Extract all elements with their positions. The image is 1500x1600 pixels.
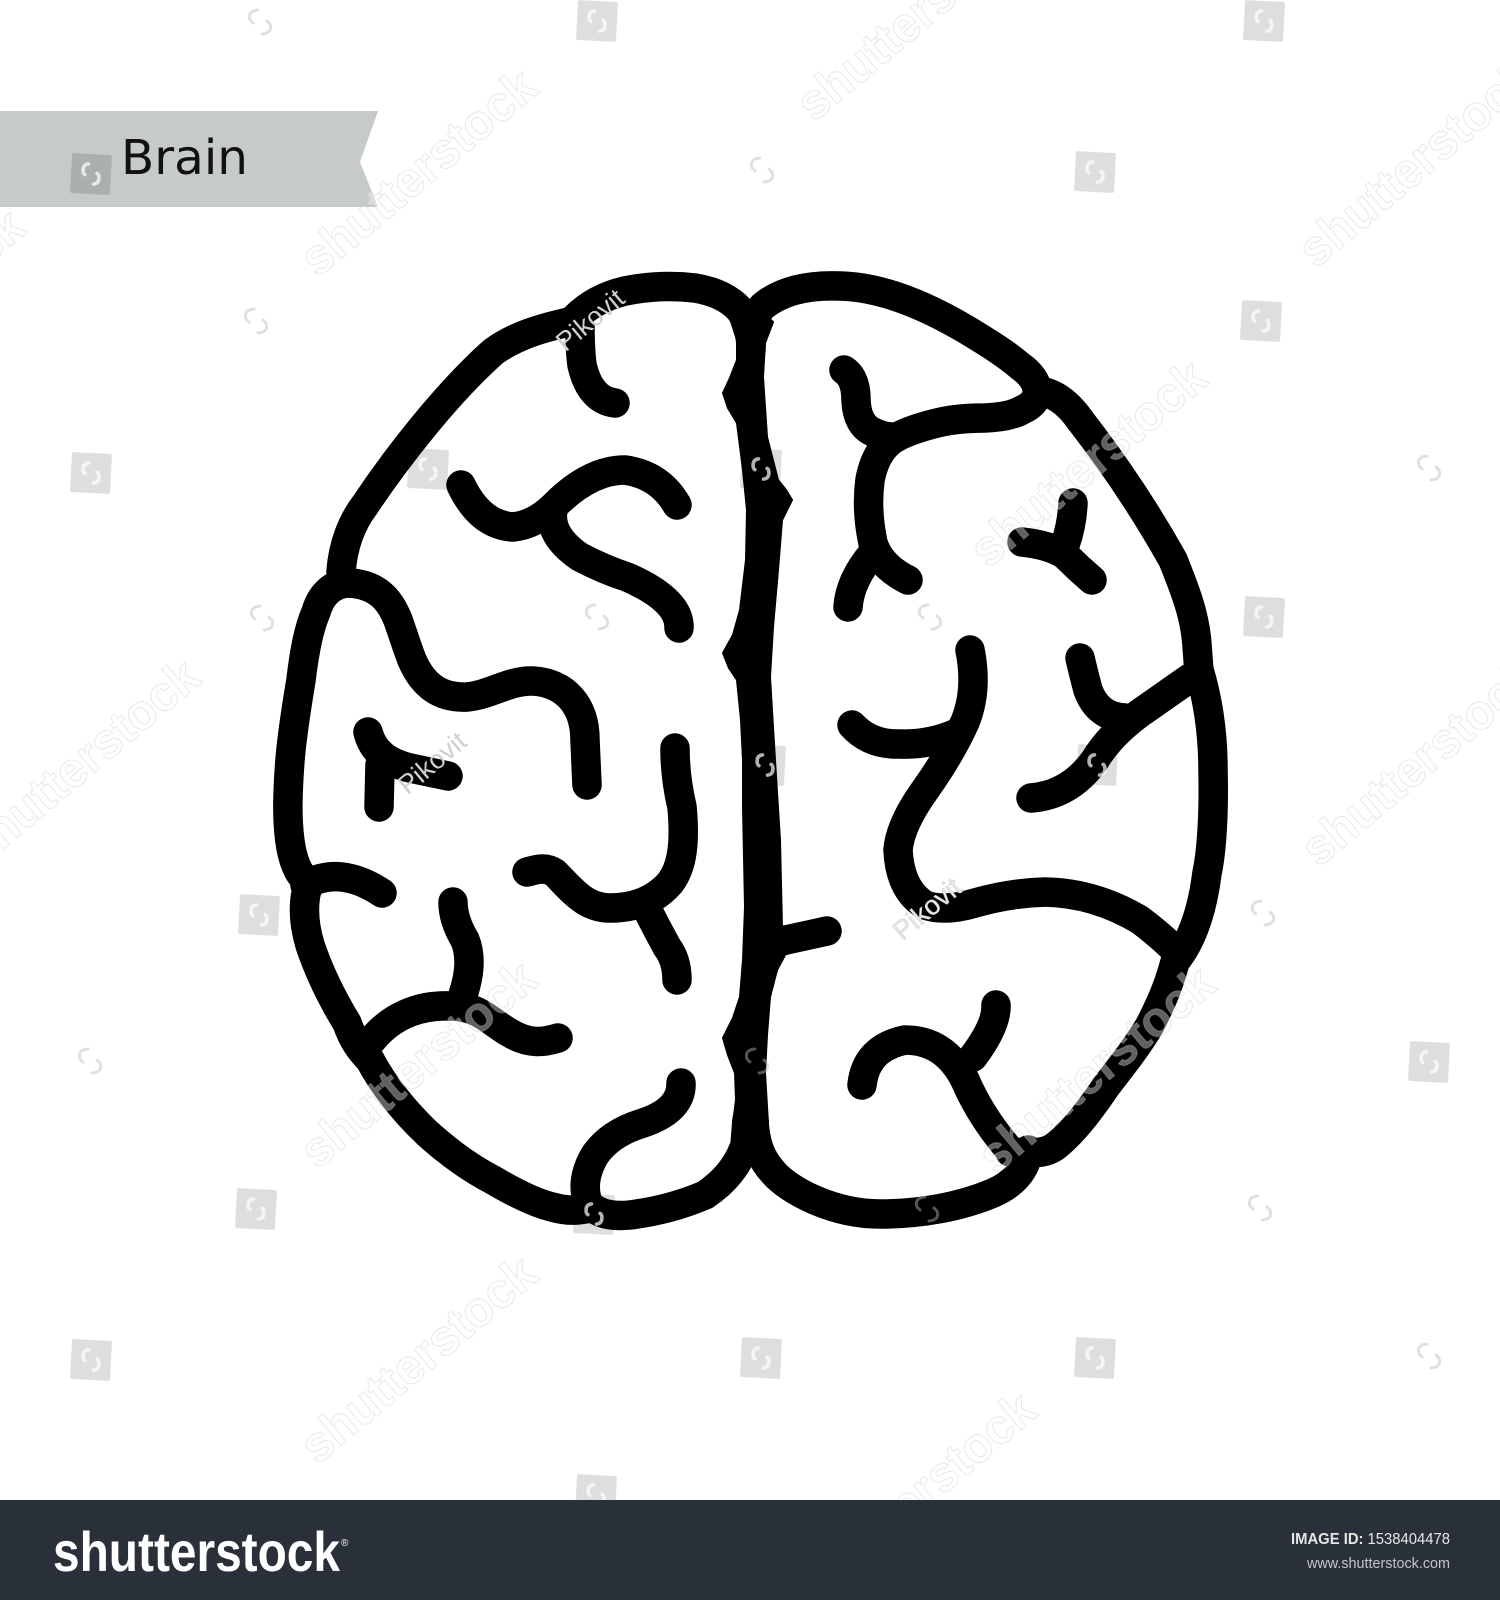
watermark wordmarks: shutterstock	[959, 348, 1217, 578]
left hemisphere: frontal outline	[341, 320, 578, 572]
right hemisphere: upper sulcus stub	[844, 370, 897, 437]
left hemisphere: top cap	[575, 287, 751, 350]
left hemisphere: lower branch	[645, 905, 677, 980]
footer website: www.shutterstock.com	[1306, 1555, 1450, 1572]
right hemisphere: Y sulcus	[1022, 503, 1092, 580]
footer logo wordmark: shutterstock	[53, 1520, 341, 1583]
left hemisphere: occipital curve	[372, 1006, 558, 1042]
left hemisphere: Y sulcus	[368, 732, 448, 807]
ribbon banner	[0, 111, 378, 207]
left hemisphere: occipital top	[305, 877, 382, 893]
watermark wordmarks: shutterstock	[289, 1244, 547, 1474]
right hemisphere: side outline	[1178, 670, 1213, 958]
right hemisphere: lower outline	[1010, 950, 1178, 1153]
right hemisphere: top outline and sulcus	[751, 286, 1037, 580]
right hemisphere: lower Y sulcus	[862, 1005, 1007, 1147]
right hemisphere: parietal outline	[1045, 392, 1199, 672]
left hemisphere: short vertical sulcus	[453, 902, 469, 1003]
left hemisphere: long sulcus	[350, 583, 587, 785]
watermark wordmarks: shutterstock	[289, 949, 547, 1179]
footer bar	[0, 1500, 1500, 1600]
watermark wordmarks: shutterstock	[289, 57, 547, 287]
left hemisphere: S sulcus	[461, 470, 677, 527]
right hemisphere: winding sulcus branch	[852, 725, 957, 744]
right hemisphere: stub from fissure	[770, 931, 827, 945]
left hemisphere: S sulcus branch	[552, 510, 679, 628]
left hemisphere: temporal outline	[288, 583, 350, 885]
left hemisphere: central curved sulcus	[527, 748, 683, 908]
watermark author names	[392, 283, 968, 946]
footer image id: IMAGE ID: 1538404478	[1291, 1531, 1450, 1548]
left hemisphere: bottom loop	[585, 1083, 747, 1216]
central fissure	[723, 303, 792, 1150]
right hemisphere: bottom outline	[754, 1120, 1028, 1214]
right hemisphere: long winding sulcus	[898, 650, 1175, 950]
watermark author names: Pikovit	[550, 283, 631, 357]
icon: brain outline seen from above	[288, 286, 1213, 1215]
watermark author names: Pikovit	[887, 872, 968, 946]
watermark author names: Pikovit	[392, 726, 473, 800]
banner label: Brain: Brain	[121, 130, 248, 186]
watermark small marks	[79, 10, 1440, 1368]
right hemisphere: lower fork	[848, 553, 873, 607]
left hemisphere: lower outline	[304, 885, 590, 1210]
right hemisphere: parietal branch	[1031, 658, 1190, 798]
footer logo registered mark: ®	[341, 1538, 349, 1549]
left hemisphere: top short sulcus	[580, 327, 615, 403]
watermark wordmarks: shutterstock	[967, 954, 1225, 1184]
